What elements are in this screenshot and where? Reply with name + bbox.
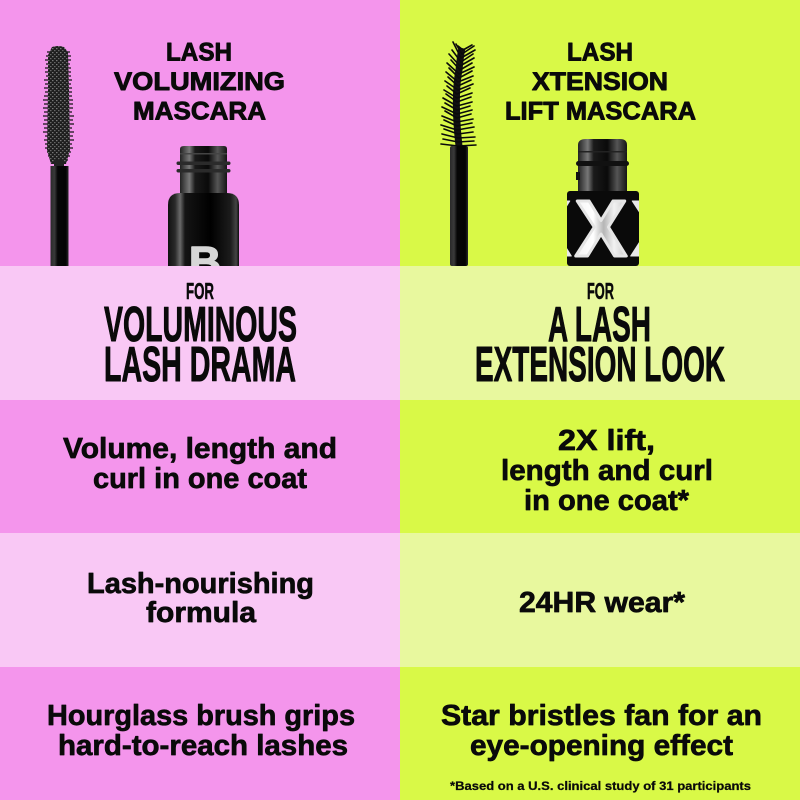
icon: star bristle mascara wand (441, 42, 476, 266)
panel: voluminous lash drama headline: FOR (186, 278, 214, 304)
panel: hourglass brush benefit (0, 667, 400, 800)
product title: lash volumizing mascara: VOLUMIZING (114, 68, 285, 96)
product title: lash xtension lift mascara: LASH (567, 38, 633, 66)
panel: 2X lift benefit: length and curl (501, 455, 713, 487)
panel: 24HR wear benefit: 24HR wear* (519, 587, 686, 619)
panel: lash-nourishing formula benefit (0, 533, 400, 667)
panel: lash extension look headline: A LASH (548, 297, 651, 352)
icon: lash volumizing mascara tube (168, 146, 239, 285)
icon: lash xtension mascara tube: X (520, 184, 572, 273)
product title: lash xtension lift mascara: XTENSION (532, 68, 668, 96)
panel: lash extension look headline: FOR (587, 278, 614, 304)
panel: volume length and curl benefit: Volume, length and (63, 433, 337, 465)
panel: lash extension look headline (400, 266, 800, 400)
panel: voluminous lash drama headline (0, 266, 400, 400)
panel: voluminous lash drama headline: VOLUMINOUS (104, 297, 297, 352)
footnote: *Based on a U.S. clinical study of 31 participants (450, 779, 751, 793)
product title: lash volumizing mascara (114, 38, 285, 126)
product title: lash volumizing mascara: MASCARA (133, 98, 266, 126)
icon: lash xtension mascara tube: X (575, 184, 627, 273)
panel: volume length and curl benefit: curl in one coat (93, 463, 307, 495)
icon: lash xtension mascara tube: X (630, 184, 682, 273)
panel: star bristles benefit: eye-opening effect (470, 730, 733, 762)
icon: lash xtension mascara tube (520, 139, 682, 273)
panel: hourglass brush benefit: hard-to-reach lashes (58, 730, 348, 762)
logo letter X: X (575, 184, 627, 273)
product title: lash xtension lift mascara (505, 38, 696, 126)
panel: star bristles benefit: Star bristles fan for an (441, 700, 762, 732)
panel: lash-nourishing formula benefit: formula (146, 597, 257, 629)
logo letter B: B (189, 238, 221, 285)
panel: hourglass brush benefit: Hourglass brush grips (47, 700, 355, 732)
panel: 2X lift benefit: 2X lift, (558, 425, 655, 457)
panel: lash volumizing product header (0, 0, 400, 285)
panel: lash xtension product header (400, 0, 800, 273)
panel: voluminous lash drama headline: LASH DRAMA (104, 337, 296, 392)
panel: lash-nourishing formula benefit: Lash-nourishing (87, 568, 314, 600)
icon: hourglass mascara wand (43, 46, 74, 266)
panel: volume length and curl benefit (0, 400, 400, 533)
product title: lash volumizing mascara: LASH (166, 38, 232, 66)
panel: star bristles benefit (400, 667, 800, 800)
panel: 2X lift benefit: in one coat* (524, 485, 690, 517)
panel: 2X lift benefit (400, 400, 800, 533)
product title: lash xtension lift mascara: LIFT MASCARA (505, 98, 696, 126)
panel: 24HR wear benefit (400, 533, 800, 667)
